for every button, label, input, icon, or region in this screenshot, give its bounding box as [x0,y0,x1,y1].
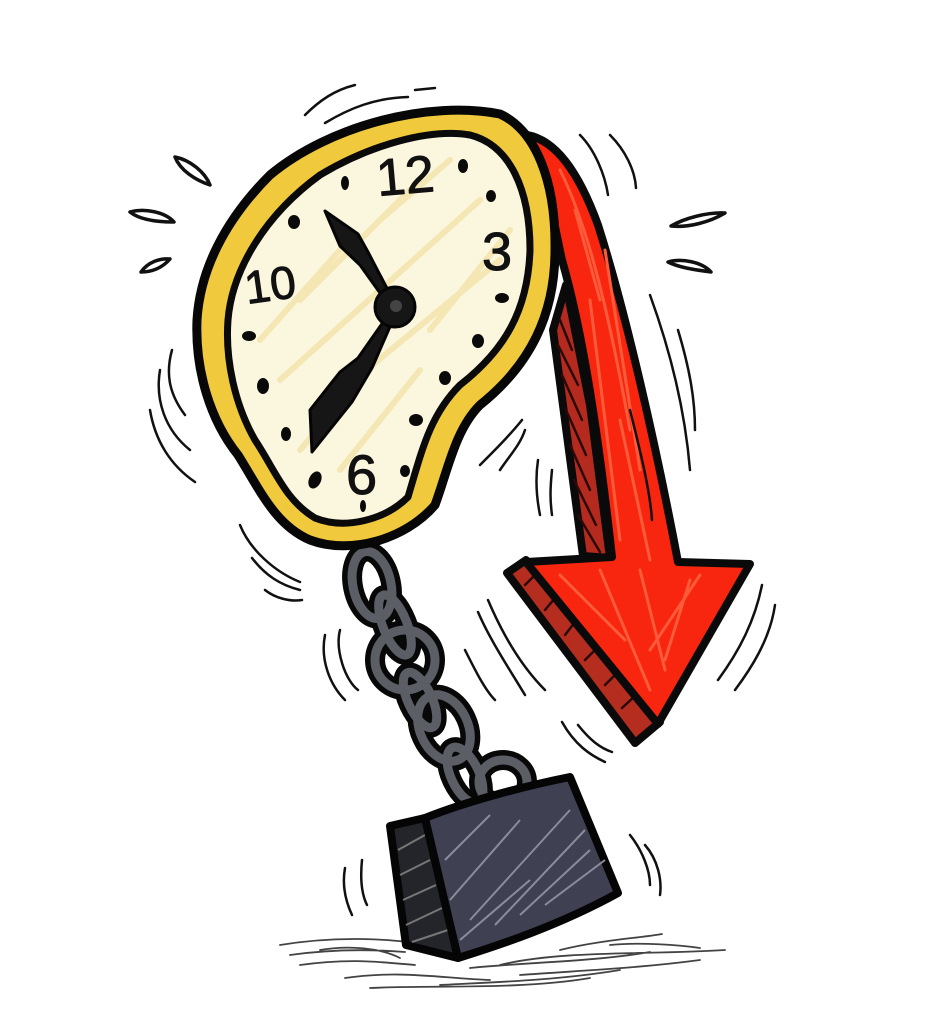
clock numerals: 6 [346,443,377,506]
clock [197,110,555,546]
motion marks [150,85,775,915]
hour ticks [242,159,509,512]
red arrow [507,135,750,743]
clock face [227,133,530,523]
weight front face [425,777,618,958]
arrow shaft side shadow [553,285,610,558]
clock gold rim [197,110,555,546]
clock numerals [241,145,512,506]
sweat drops [130,157,725,272]
arrow head side shadow [507,560,660,743]
chain links fill [346,548,527,808]
clock hands [310,211,415,452]
clock numerals: 3 [482,222,512,282]
chain links outline [346,548,527,808]
weight [390,777,618,958]
chain [346,548,527,808]
clock numerals: 10 [241,255,299,314]
weight side face [390,818,458,958]
arrow front face [526,135,750,724]
ground shadow scribble [280,934,725,988]
clock numerals: 12 [374,145,437,208]
